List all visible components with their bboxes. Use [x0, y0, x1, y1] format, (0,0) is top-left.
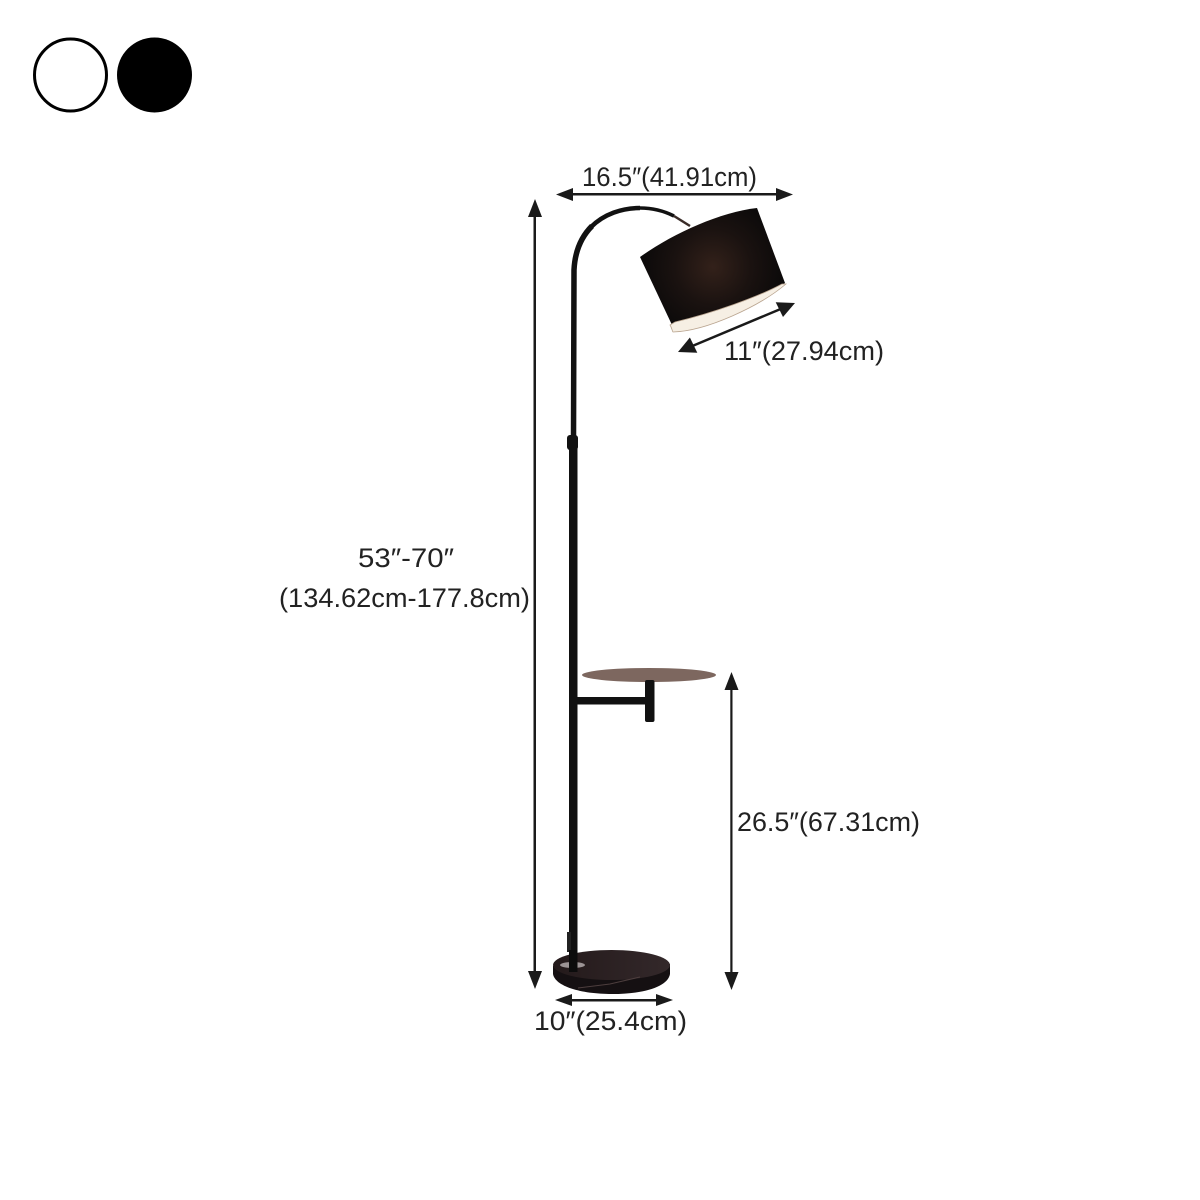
dimension arrow: overall height — [528, 199, 542, 989]
dimension label: table height: 26.5″(67.31cm) — [737, 807, 920, 837]
dimension arrow: lamp reach — [556, 188, 793, 201]
telescopic collar — [567, 435, 578, 450]
dimension label: lamp reach: 16.5″(41.91cm) — [582, 162, 757, 192]
dimension label: overall height: (134.62cm-177.8cm) — [279, 583, 530, 613]
marble base — [553, 950, 670, 994]
dimension arrow: table height — [724, 672, 738, 990]
dimension label: base diameter: 10″(25.4cm) — [534, 1006, 687, 1036]
colour swatch: white — [34, 39, 106, 111]
dimension arrow: shade diameter — [678, 302, 795, 353]
dimension label: overall height: 53″-70″ — [358, 543, 454, 573]
colour swatch: black — [117, 38, 192, 112]
dimension label: shade diameter: 11″(27.94cm) — [724, 336, 884, 366]
dimension arrow: base diameter — [555, 994, 673, 1006]
lamp shade — [640, 208, 786, 332]
side table — [572, 668, 716, 722]
telescopic lower pole — [569, 448, 578, 968]
dimension label: overall height — [279, 543, 530, 613]
floor lamp illustration — [553, 208, 786, 994]
lamp arm and upper pole — [574, 208, 690, 440]
pole clamp — [567, 932, 571, 952]
